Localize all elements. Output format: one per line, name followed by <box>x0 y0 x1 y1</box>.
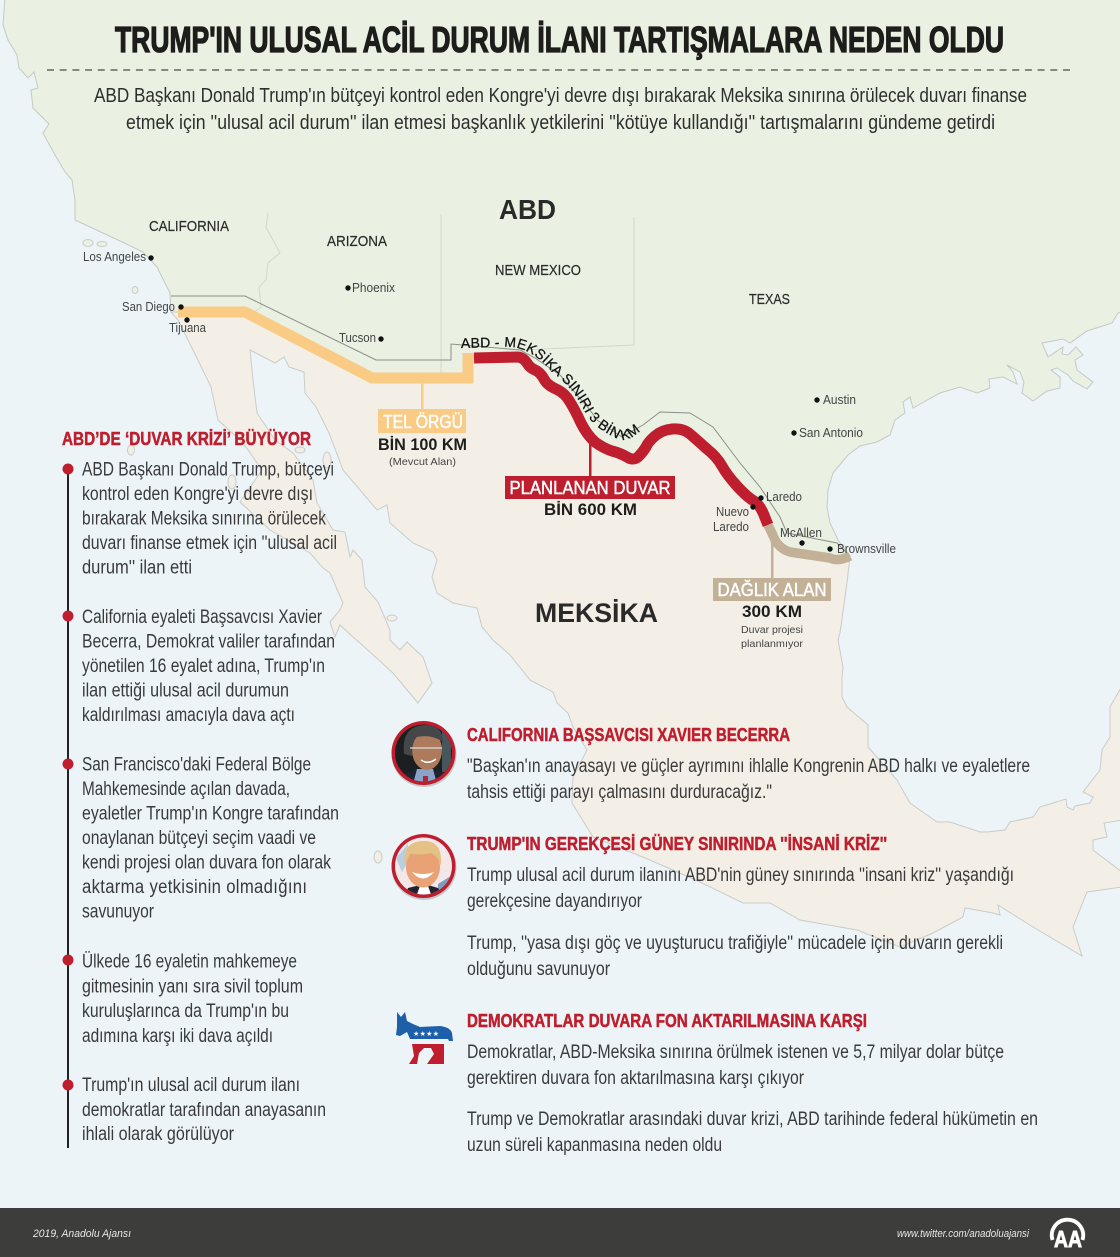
bullet: second item: California eyaleti Başsavcısı Xavier <box>82 607 323 628</box>
text: Trump paragraph two <box>467 933 1003 980</box>
bullet: third item: Mahkemesinde açılan davada, <box>82 779 290 800</box>
bullet: fourth item <box>62 952 303 1047</box>
callout: planned wall: BİN 600 KM <box>544 500 637 519</box>
bullet: first item: kontrol eden Kongre'yi devre dışı <box>82 484 313 505</box>
text: Democrats paragraph one <box>467 1042 1004 1089</box>
callout: mountain area: 300 KM <box>742 602 802 621</box>
map: Mexico land <box>171 312 1120 956</box>
map: city markers and names: Nuevo <box>716 505 749 519</box>
bullet: first item: durum'' ilan etti <box>82 558 192 578</box>
text: Trump paragraph two: Trump, ''yasa dışı göç ve uyuşturucu trafiğiyle'' mücadele için duvarın gerekli <box>467 933 1003 954</box>
bullet: first item <box>62 460 337 578</box>
map: base map of USA and Mexico <box>3 0 1120 956</box>
panel: wall crisis timeline <box>62 429 339 1148</box>
footer bar <box>0 1208 1120 1257</box>
text: Trump paragraph one: gerekçesine dayandırıyor <box>467 891 643 912</box>
map: region labels: MEKSİKA <box>535 598 658 628</box>
heading: Democrats: DEMOKRATLAR DUVARA FON AKTARILMASINA KARŞI <box>467 1011 867 1031</box>
callout: wire fence: TEL ÖRGÜ <box>383 412 463 432</box>
text: Trump paragraph one <box>467 865 1014 912</box>
map: city markers and names: Austin <box>823 393 856 407</box>
text: Democrats paragraph two: uzun süreli kapanmasına neden oldu <box>467 1135 722 1156</box>
map: city markers and names: Laredo <box>766 490 802 504</box>
bullet: second item: ilan ettiği ulusal acil durumun <box>82 680 289 702</box>
footer: copyright: 2019, Anadolu Ajansı <box>32 1228 131 1240</box>
map: region labels: NEW MEXICO <box>495 263 581 279</box>
bullet: first item: ABD Başkanı Donald Trump, bütçeyi <box>82 460 334 480</box>
text: Democrats paragraph one: gerektiren duvara fon aktarılmasına karşı çıkıyor <box>467 1068 805 1089</box>
callout: planned wall <box>505 440 675 519</box>
bullet: fourth item: Ülkede 16 eyaletin mahkemeye <box>82 952 297 972</box>
text: Democrats paragraph two <box>467 1109 1038 1156</box>
bullet: first item: duvarı finanse etmek için ''ulusal acil <box>82 533 337 554</box>
map: region labels: ARIZONA <box>327 234 387 250</box>
map: wire fence segment <box>178 312 468 378</box>
bullet: second item <box>62 607 335 726</box>
text: Trump paragraph one: Trump ulusal acil durum ilanını ABD'nin güney sınırında ''insani kriz'' yaşandığı <box>467 865 1014 886</box>
panel: Becerra statement <box>392 721 1030 803</box>
map: region labels: ABD <box>499 194 556 225</box>
bullet: third item: onaylanan bütçeyi seçim vaadi ve <box>82 828 316 849</box>
map: city markers and names: San Antonio <box>799 426 863 440</box>
bullet: fourth item: adımına karşı iki dava açıldı <box>82 1026 273 1047</box>
icon: Democratic donkey: ★★★★ <box>413 1030 439 1038</box>
map: city markers and names <box>83 250 896 556</box>
map: planned wall segment <box>474 357 768 525</box>
bullet: second item: Becerra, Demokrat valiler tarafından <box>82 632 335 652</box>
bullet: third item: eyaletler Trump'ın Kongre tarafından <box>82 804 339 824</box>
bullet: first item: bırakarak Meksika sınırına örülecek <box>82 508 326 530</box>
bullet: fourth item: gitmesinin yanı sıra sivil toplum <box>82 976 303 998</box>
map: region labels: TEXAS <box>749 292 790 308</box>
callout: mountain area: Duvar projesi <box>741 624 803 636</box>
map: city markers and names: Tucson <box>339 331 376 345</box>
heading: wall crisis: ABD’DE ‘DUVAR KRİZİ’ BÜYÜYOR <box>62 429 311 449</box>
map: city markers and names: Laredo <box>713 520 749 534</box>
bullet: third item: kendi projesi olan duvara fon olarak <box>82 852 331 874</box>
callout: mountain area <box>713 540 831 650</box>
map: city markers and names: Tijuana <box>169 321 206 335</box>
bullet: fourth item: kuruluşlarınca da Trump'ın bu <box>82 1001 289 1022</box>
bullet: fifth item: Trump'ın ulusal acil durum ilanı <box>82 1075 300 1096</box>
bullet: second item: kaldırılması amacıyla dava açtı <box>82 705 295 726</box>
bullet: third item: savunuyor <box>82 902 155 922</box>
map: city markers and names: Brownsville <box>837 542 896 556</box>
map: border curved label: ABD - MEKSİKA SINIRI 3 BİN KM <box>460 337 640 440</box>
map: city markers and names: McAllen <box>780 526 822 540</box>
bullet: third item <box>62 754 339 922</box>
bullet: fifth item: demokratlar tarafından anayasanın <box>82 1100 326 1121</box>
map: islands <box>83 240 397 863</box>
icon: Trump portrait <box>392 834 456 900</box>
icon: Democratic donkey <box>396 1012 453 1064</box>
map: region labels <box>149 194 790 628</box>
bullet: fifth item: ihlali olarak görülüyor <box>82 1124 235 1145</box>
bullet: second item: yönetilen 16 eyalet adına, Trump'ın <box>82 656 325 677</box>
map: mountain segment <box>768 525 850 560</box>
map: region labels: CALIFORNIA <box>149 219 229 235</box>
text: Democrats paragraph one: Demokratlar, ABD-Meksika sınırına örülmek istenen ve 5,7 milyar dolar bütçe <box>467 1042 1004 1063</box>
icon: AA logo <box>1052 1220 1083 1252</box>
bullet: fifth item <box>62 1075 326 1145</box>
bullet: third item: San Francisco'daki Federal Bölge <box>82 754 311 776</box>
map: city markers and names: Los Angeles <box>83 250 146 264</box>
callout: wire fence <box>378 383 467 468</box>
intro text: etmek için ''ulusal acil durum'' ilan etmesi başkanlık yetkilerini ''kötüye kullandığı'' tartışmalarını gündeme getirdi <box>126 112 995 134</box>
bullet: third item: aktarma yetkisinin olmadığını <box>82 876 307 897</box>
heading: Becerra: CALIFORNIA BAŞSAVCISI XAVIER BECERRA <box>467 725 790 745</box>
map: state borders <box>250 213 634 377</box>
text: Trump paragraph two: olduğunu savunuyor <box>467 959 611 980</box>
icon: AA logo: AA <box>1054 1226 1082 1252</box>
map: city markers and names: San Diego <box>122 300 175 314</box>
callout: mountain area: planlanmıyor <box>741 638 804 650</box>
map: international border line <box>171 296 850 556</box>
icon: Becerra portrait <box>392 721 456 787</box>
map: city markers and names: Phoenix <box>352 281 396 295</box>
footer: twitter link: www.twitter.com/anadoluajansi <box>897 1228 1029 1240</box>
panel: Trump justification <box>392 834 1014 980</box>
panel: Democrats opposition <box>396 1011 1038 1156</box>
callout: wire fence: (Mevcut Alan) <box>389 456 456 468</box>
callout: wire fence: BİN 100 KM <box>378 435 467 454</box>
callout: planned wall: PLANLANAN DUVAR <box>510 478 670 498</box>
callout: mountain area: DAĞLIK ALAN <box>718 579 826 600</box>
intro text <box>94 85 1027 134</box>
map: USA land <box>3 0 1120 561</box>
quote: Becerra: tahsis ettiği parayı çalmasını durduracağız." <box>467 782 772 803</box>
heading: Trump: TRUMP'IN GEREKÇESİ GÜNEY SINIRINDA ''İNSANİ KRİZ'' <box>467 834 887 854</box>
quote: Becerra <box>467 756 1030 803</box>
